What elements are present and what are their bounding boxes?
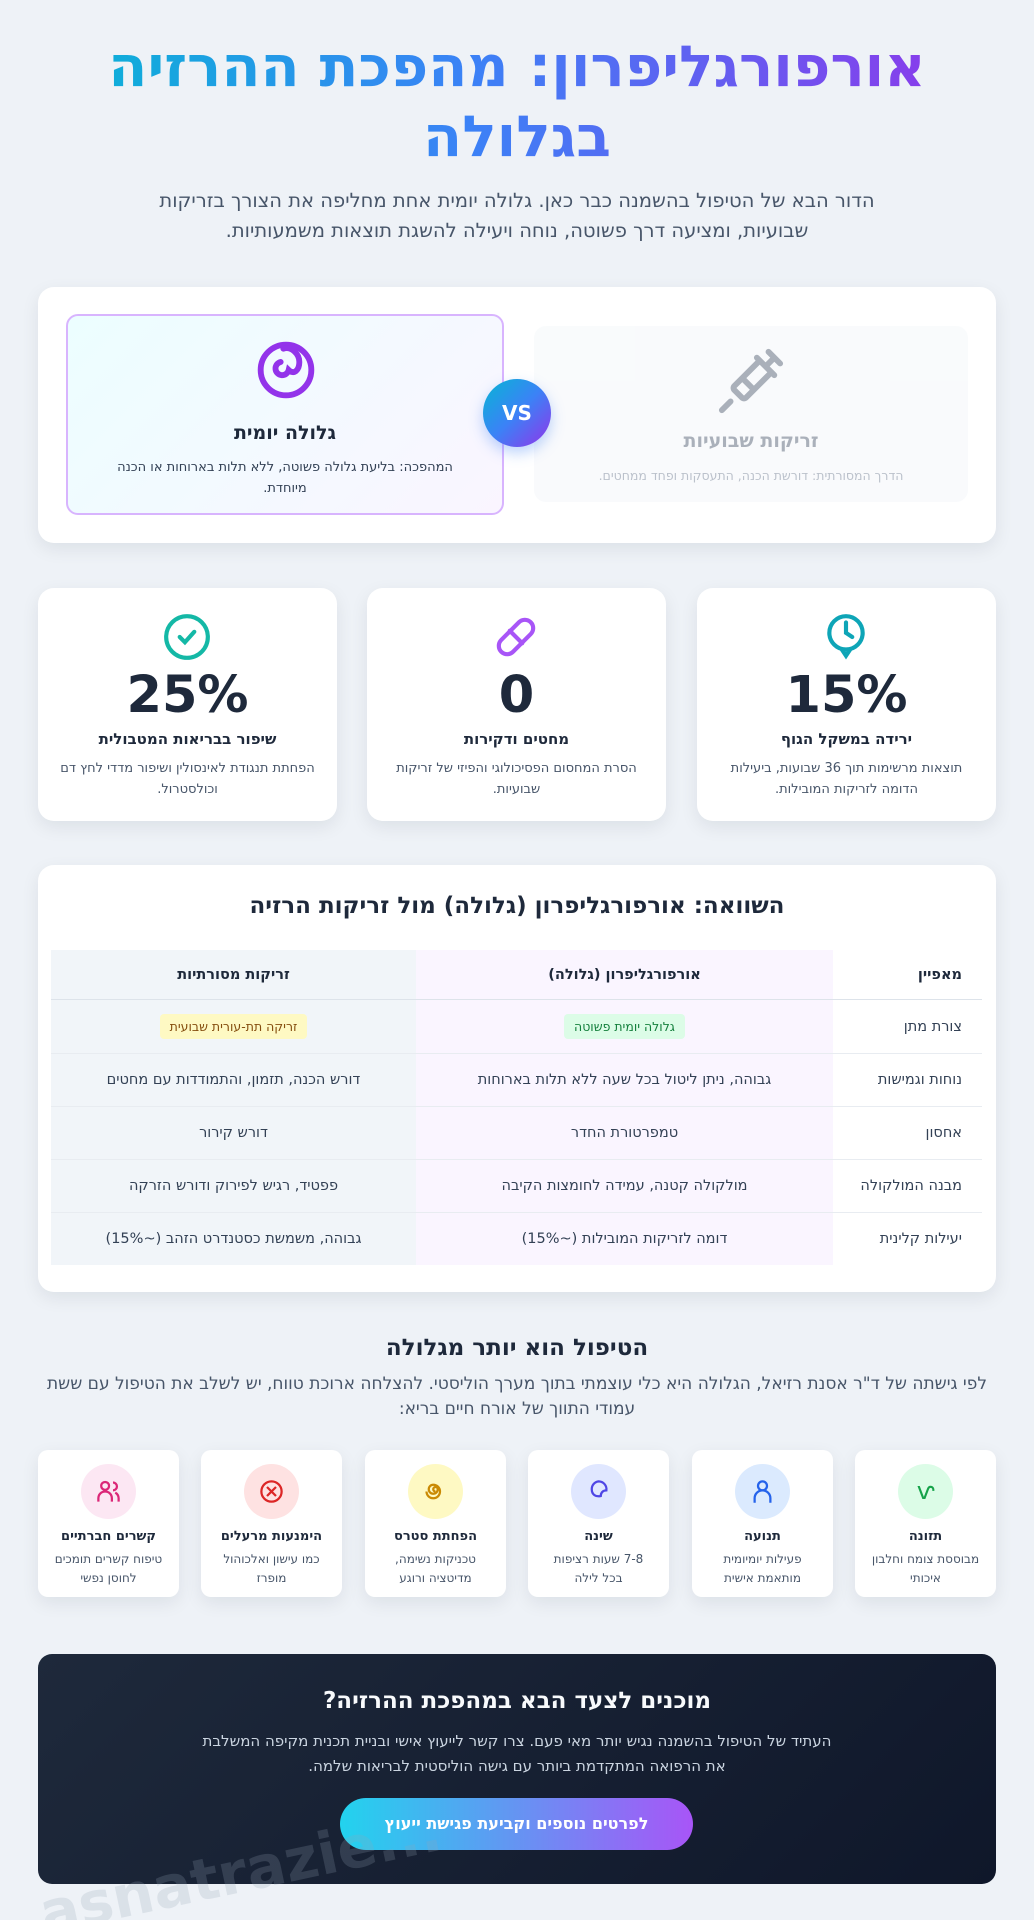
card: stress	[365, 1450, 506, 1597]
number: 15%	[785, 666, 908, 725]
icon: nutrition	[898, 1464, 953, 1519]
title: אורפורגליפרון: מהפכת ההרזיה בגלולה	[108, 34, 926, 170]
card: stress: הפחתת סטרס	[394, 1529, 477, 1544]
icon: pill	[258, 342, 314, 398]
row: convenience: נוחות וגמישות	[878, 1072, 962, 1088]
panel: stat metabolic	[38, 588, 337, 821]
row: molecule	[51, 1160, 982, 1213]
card: movement: פעילות יומיומית מותאמת אישית	[723, 1552, 802, 1585]
row: efficacy: דומה לזריקות המובילות (~15%)	[522, 1231, 727, 1247]
text: תוצאות מרשימות תוך 36 שבועות, ביעילות הדומה לזריקות המובילות.	[731, 761, 962, 797]
header row: אורפורגליפרון (גלולה)	[548, 967, 701, 983]
text: הסרת המחסום הפסיכולוגי והפיזי של זריקות שבועיות.	[396, 761, 637, 797]
panel: vs comparison	[38, 287, 996, 543]
header row: מאפיין	[918, 967, 962, 983]
card: avoid harmful	[201, 1450, 342, 1597]
row: convenience	[51, 1054, 982, 1107]
icon: person	[735, 1464, 790, 1519]
text: הדרך המסורתית: דורשת הכנה, התעסקות ופחד ממחטים.	[599, 468, 903, 483]
number: 0	[499, 666, 534, 725]
icon: check	[164, 614, 210, 660]
heading: מוכנים לצעד הבא במהפכת ההרזיה?	[323, 1688, 711, 1714]
card: movement	[692, 1450, 833, 1597]
card: sleep: 7-8 שעות רציפות בכל לילה	[554, 1552, 643, 1585]
card: avoid harmful: הימנעות מרעלים	[221, 1529, 322, 1544]
row: convenience: גבוהה, ניתן ליטול בכל שעה ללא תלות בארוחות	[478, 1072, 771, 1088]
heading: holistic: הטיפול הוא יותר מגלולה	[386, 1335, 648, 1361]
label: מחטים ודקירות	[464, 730, 569, 748]
button	[340, 1798, 693, 1850]
row: molecule: פפטיד, רגיש לפירוק ודורש הזרקה	[129, 1178, 338, 1194]
icon: moon	[571, 1464, 626, 1519]
row: storage: אחסון	[926, 1125, 962, 1141]
row: efficacy: גבוהה, משמשת כסטנדרט הזהב (~15%)	[106, 1231, 361, 1247]
card: social: קשרים חברתיים	[61, 1529, 156, 1544]
vs badge	[483, 379, 551, 447]
row: storage	[51, 1107, 982, 1160]
heading: השוואה: אורפורגליפרון (גלולה) מול זריקות הרזיה	[250, 893, 784, 919]
row: delivery: זריקה תת-עורית שבועית	[170, 1019, 297, 1034]
label: ירידה במשקל הגוף	[781, 730, 912, 748]
icon: capsule	[496, 618, 536, 656]
text: הפחתת תנגודת לאינסולין ושיפור מדדי לחץ דם וכולסטרול.	[60, 761, 315, 797]
card: nutrition: מבוססת צומח וחלבון איכותי	[872, 1552, 979, 1585]
icon: people	[81, 1464, 136, 1519]
card: weekly injections	[534, 326, 968, 502]
icon: nutrition: ⱱ	[917, 1477, 934, 1505]
row: delivery: צורת מתן	[904, 1019, 962, 1035]
card: nutrition: תזונה	[909, 1529, 942, 1544]
card: sleep: שינה	[584, 1529, 613, 1544]
row: delivery: גלולה יומית פשוטה	[574, 1019, 675, 1034]
card: movement: תנועה	[744, 1529, 781, 1544]
row: efficacy: יעילות קלינית	[880, 1231, 962, 1247]
text: העתיד של הטיפול בהשמנה נגיש יותר מאי פעם. צרו קשר לייעוץ אישי ובניית תכנית מקיפה המשלבת את הרפואה המתקדמת ביותר עם גישה הוליסטית לבריאות שלמה.	[203, 1732, 831, 1775]
card: avoid harmful: כמו עישון ואלכוהול מופרז	[223, 1552, 320, 1585]
panel: stat weight	[697, 588, 996, 821]
icon: x circle	[244, 1464, 299, 1519]
row: storage: דורש קירור	[199, 1125, 268, 1141]
number: 25%	[126, 666, 249, 725]
text: holistic intro: לפי גישתה של ד"ר אסנת רזיאל, הגלולה היא כלי עוצמתי בתוך מערך הוליסטי. להצלחה ארוכת טווח, יש לשלב את הטיפול עם ששת עמודי התווך של אורח חיים בריא:	[47, 1374, 987, 1419]
row: molecule: מולקולה קטנה, עמידה לחומצות הקיבה	[501, 1178, 748, 1194]
subtitle: הדור הבא של הטיפול בהשמנה כבר כאן. גלולה יומית אחת מחליפה את הצורך בזריקות שבועיות, ומציעה דרך פשוטה, נוחה ויעילה להשגת תוצאות משמעותיות.	[159, 189, 875, 242]
row: efficacy	[106, 1231, 962, 1247]
row: storage: טמפרטורת החדר	[571, 1125, 678, 1141]
header row: זריקות מסורתיות	[177, 967, 290, 983]
card: nutrition	[855, 1450, 996, 1597]
heading: זריקות שבועיות	[683, 430, 818, 452]
vs badge: VS	[502, 401, 532, 425]
card: social	[38, 1450, 179, 1597]
icon: clock	[827, 614, 865, 660]
row: molecule: מבנה המולקולה	[860, 1178, 962, 1194]
table	[51, 950, 982, 1265]
panel: stat needles	[367, 588, 666, 821]
row: delivery	[51, 1000, 982, 1054]
button: לפרטים נוספים וקביעת פגישת ייעוץ	[385, 1814, 648, 1833]
card: social: טיפוח קשרים תומכים לחוסן נפשי	[55, 1552, 162, 1585]
heading: גלולה יומית	[234, 422, 336, 444]
icon: spiral	[408, 1464, 463, 1519]
icon: syringe	[718, 348, 783, 414]
header row	[51, 950, 982, 1000]
label: שיפור בבריאות המטבולית	[99, 730, 276, 748]
panel: comparison table	[38, 865, 996, 1292]
card: daily pill	[66, 314, 504, 515]
row: convenience: דורש הכנה, תזמון, והתמודדות עם מחטים	[107, 1072, 360, 1088]
panel: call to action	[38, 1654, 996, 1884]
card: sleep	[528, 1450, 669, 1597]
card: stress: טכניקות נשימה, מדיטציה ורוגע	[395, 1552, 476, 1585]
text: המהפכה: בליעת גלולה פשוטה, ללא תלות בארוחות או הכנה מיוחדת.	[117, 460, 453, 496]
